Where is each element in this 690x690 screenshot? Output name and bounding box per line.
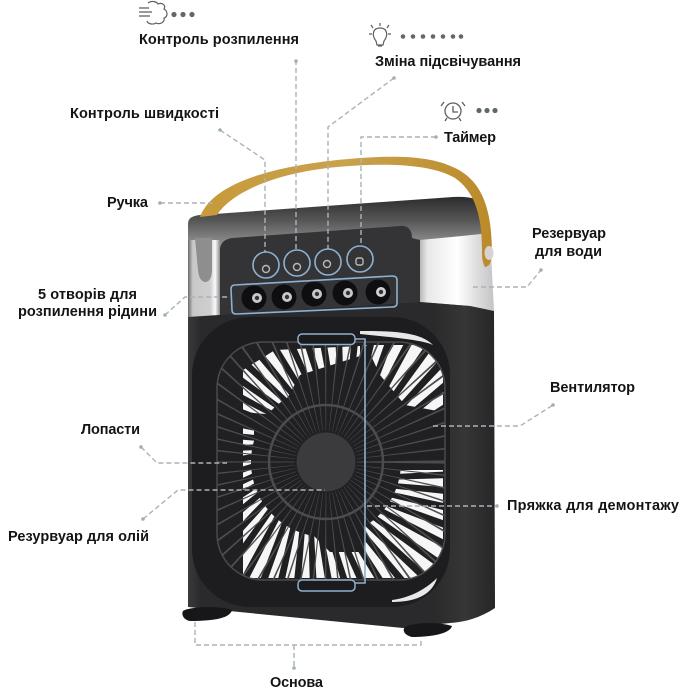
leader lines [141,60,553,668]
spokes [236,372,416,552]
label: handle: Ручка [107,195,149,211]
inner ring [269,405,383,519]
handle [200,157,494,267]
white gaps between blades [243,345,443,578]
fan frame [192,317,450,607]
label: fan: Вентилятор [550,380,635,396]
nozzle knobs [242,280,390,310]
icon: light bulb [369,23,391,46]
label: blades: Лопасти [81,422,140,438]
white glints on frame [360,331,437,602]
label: five nozzles line two: розпилення рідини [18,304,157,320]
control panel [220,226,420,325]
label: mist control: Контроль розпилення [139,32,299,48]
label: water tank line two: для води [535,244,602,260]
icon: alarm clock [441,102,465,121]
grill rim [217,342,445,580]
buckle outlines [298,334,365,591]
label: oil tank: Резурвуар для олій [8,529,149,545]
left tank indicator [195,238,212,282]
label: five nozzles: 5 отворів для [38,287,137,303]
leader end dots [139,59,555,670]
fan hub [296,432,356,492]
label: water tank: Резервуар [532,226,606,242]
light mode dots [401,34,463,39]
lower housing [188,302,495,628]
tank band [188,197,487,325]
feet [182,607,452,637]
right tank window [420,233,494,311]
label: light change: Зміна підсвічування [375,54,521,70]
label: speed control: Контроль швидкості [70,106,219,122]
nozzle panel [231,276,397,314]
fan grill [218,342,444,580]
label: timer: Таймер [444,130,496,146]
left tank window [188,240,220,318]
device body [188,197,495,628]
mist level dots [171,12,195,17]
label: removal buckle: Пряжка для демонтажу [507,498,679,514]
control buttons [253,246,373,278]
handle pivot [484,246,494,260]
icon: mist [139,1,167,24]
timer dots [476,108,498,113]
